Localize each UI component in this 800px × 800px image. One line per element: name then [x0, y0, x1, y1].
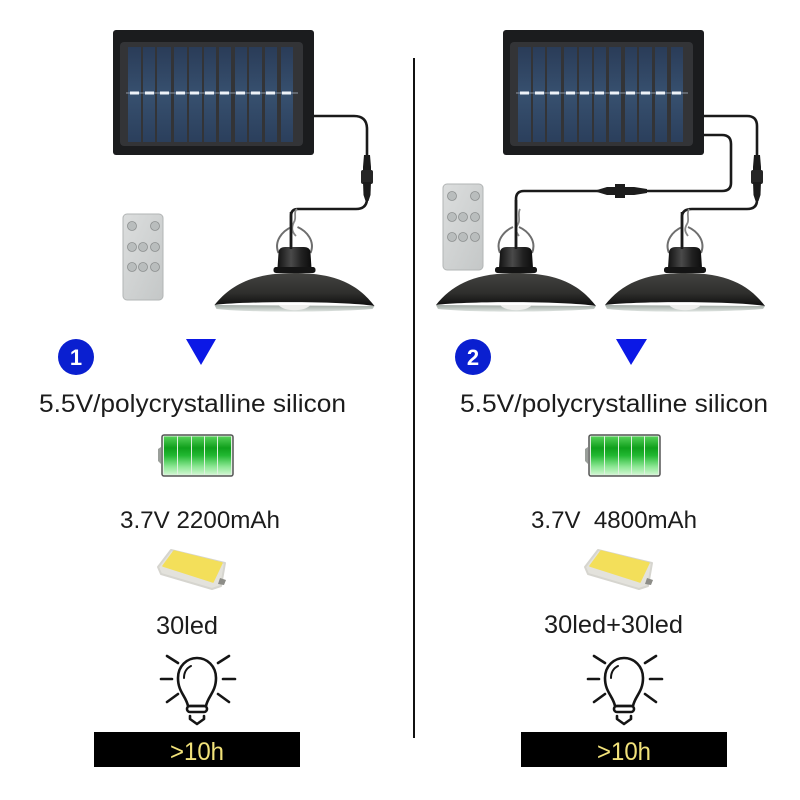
remote control 2 [443, 184, 483, 270]
spec: led 1: 30led [156, 612, 218, 640]
panel: option 1 product [113, 30, 374, 312]
runtime bar 1: >10h [170, 738, 224, 766]
runtime bar 2 [521, 732, 727, 767]
icon: battery 2 [585, 435, 660, 476]
badge 1: 1 [70, 345, 82, 370]
remote control 1 [123, 214, 163, 300]
badge 2: 2 [467, 345, 479, 370]
badge 2 [455, 339, 491, 375]
pendant lamp 1 [214, 209, 374, 312]
spec: battery 1: 3.7V 2200mAh [120, 507, 280, 534]
icon: led chip 1 [158, 550, 226, 589]
divider line [413, 58, 415, 738]
solar panel 1 [113, 30, 314, 155]
solar panel 2 [503, 30, 704, 155]
spec: battery 2: 3.7V 4800mAh [531, 507, 697, 534]
spec: panel 1: 5.5V/polycrystalline silicon [39, 390, 346, 418]
runtime bar 2: >10h [597, 738, 651, 766]
icon: light bulb 2 [588, 656, 662, 724]
runtime bar 1 [94, 732, 300, 767]
cables 2 [516, 116, 763, 256]
triangle marker 1 [186, 339, 216, 365]
cable 1 [291, 116, 373, 256]
triangle marker 2 [616, 339, 647, 365]
spec: panel 2: 5.5V/polycrystalline silicon [460, 390, 768, 418]
badge 1 [58, 339, 94, 375]
spec: led 2: 30led+30led [544, 611, 683, 639]
pendant lamp 2b [605, 209, 765, 312]
panel: option 2 product [436, 30, 765, 312]
icon: battery 1 [158, 435, 233, 476]
icon: light bulb 1 [161, 656, 235, 724]
icon: led chip 2 [585, 550, 653, 589]
pendant lamp 2a [436, 200, 596, 312]
